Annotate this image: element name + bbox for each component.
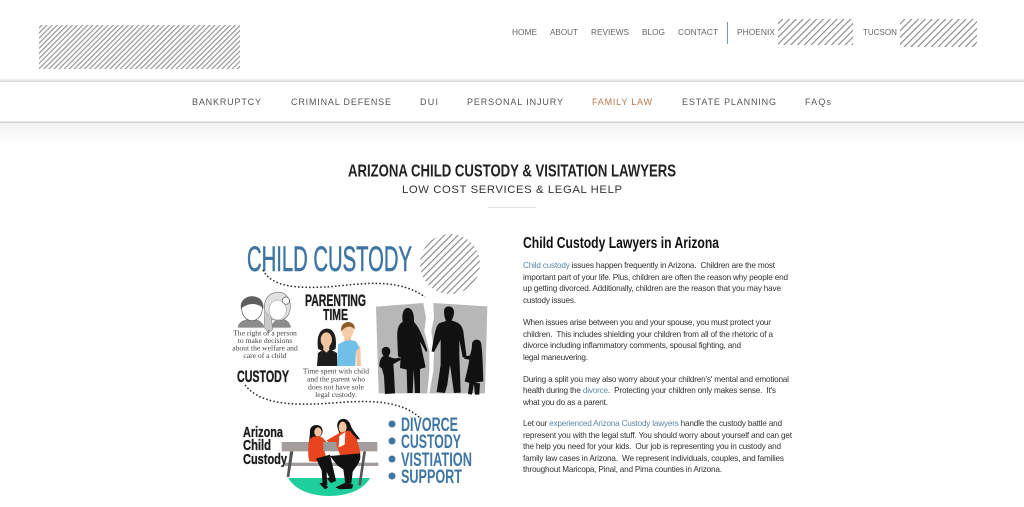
main navigation bar: BANKRUPTCY: [192, 97, 261, 107]
paragraph 3: [522, 375, 789, 407]
custody definition: [232, 328, 298, 360]
services list: SUPPORT: [401, 467, 462, 488]
torn family photo: [376, 303, 487, 395]
parenting time definition: does not have sole: [308, 382, 365, 392]
paragraph 2: [523, 318, 773, 362]
top navigation: REVIEWS: [591, 28, 630, 37]
arizona child custody label: Child: [243, 437, 271, 454]
main navigation bar: [0, 78, 1024, 144]
icon: boy and girl: [238, 292, 291, 333]
paragraph 1: custody issues.: [523, 296, 576, 305]
main navigation bar: ESTATE PLANNING: [682, 97, 776, 107]
paragraph 1: important part of your life. Plus, children are often the reason why people end: [523, 273, 788, 282]
infographic: child custody: [232, 234, 487, 496]
paragraph 2: legal maneuvering.: [523, 353, 588, 362]
services list: [388, 415, 472, 488]
top navigation: [512, 22, 728, 44]
main navigation bar: DUI: [420, 97, 438, 107]
main navigation bar: CRIMINAL DEFENSE: [291, 97, 391, 107]
custody definition: to make decisions: [238, 336, 292, 345]
phoenix phone: [737, 19, 853, 45]
paragraph 1: [523, 261, 788, 305]
custody definition: The right of a person: [233, 328, 297, 338]
custody definition: about the welfare and: [232, 344, 298, 352]
arizona child custody label: [243, 424, 287, 468]
tucson phone: [863, 19, 977, 47]
dotted path lower: [245, 385, 420, 418]
services list: DIVORCE: [401, 415, 458, 436]
paragraph 4: family law cases in Arizona. We represent individuals, couples, and families: [523, 454, 784, 463]
paragraph 2: When issues arise between you and your spouse, you must protect your: [523, 318, 771, 327]
parenting time label: TIME: [323, 307, 348, 324]
paragraph 3: what you do as a parent.: [522, 398, 608, 407]
arizona child custody label: Arizona: [243, 424, 283, 441]
parenting time definition: Time spent with child: [303, 366, 369, 376]
parenting time label: PARENTING: [305, 292, 366, 310]
paragraph 3: During a split you may also worry about your children's' mental and emotional: [523, 375, 789, 384]
custody definition: care of a child: [243, 351, 287, 360]
paragraph 2: children. This includes shielding your children from all of the rhetoric of a: [523, 330, 773, 339]
parenting time label: [305, 292, 366, 324]
subtitle: LOW COST SERVICES & LEGAL HELP: [402, 184, 622, 196]
paragraph 4: [523, 419, 793, 474]
paragraph 1: Child custody issues happen frequently in Arizona. Children are the most: [523, 261, 776, 270]
main navigation bar: PERSONAL INJURY: [467, 97, 563, 107]
top navigation: HOME: [512, 28, 538, 37]
icon: parents: [317, 322, 361, 366]
services list: CUSTODY: [401, 432, 461, 453]
paragraph 2: divorce including inflammatory comments, spousal fighting, and: [523, 341, 741, 350]
top navigation: ABOUT: [550, 28, 578, 37]
paragraph 4: the help you need for your kids. Our job is representing you in custody and: [523, 442, 781, 451]
silhouette: child left: [379, 347, 401, 394]
paragraph 1: up getting divorced. Additionally, children are the reason that you may have: [523, 284, 781, 293]
page title: ARIZONA CHILD CUSTODY & VISITATION LAWYERS: [348, 160, 676, 180]
logo placeholder: [39, 25, 240, 69]
main navigation bar: FAQs: [805, 97, 832, 107]
infographic title: CHILD CUSTODY: [247, 240, 412, 279]
mother: [337, 419, 360, 439]
top navigation: CONTACT: [678, 28, 718, 37]
paragraph 4: Let our experienced Arizona Custody lawyers handle the custody battle and: [523, 419, 782, 428]
services list: VISTIATION: [401, 450, 472, 471]
phoenix phone: PHOENIX: [737, 28, 776, 37]
paragraph 3: health during the divorce. Protecting your children only makes sense. It's: [523, 386, 776, 395]
hatched circle: [420, 234, 480, 294]
dotted path upper: [263, 270, 425, 297]
daughter: [309, 425, 323, 445]
top navigation: BLOG: [642, 28, 665, 37]
tucson phone: TUCSON: [863, 28, 897, 37]
main navigation bar: FAMILY LAW: [592, 97, 652, 107]
silhouette: father: [432, 306, 467, 393]
silhouette: mother: [397, 308, 427, 393]
paragraph 4: represent you with the legal stuff. You should worry about yourself and can get: [523, 431, 793, 440]
arizona child custody label: Custody: [243, 451, 287, 468]
parenting time definition: [303, 366, 369, 399]
parenting time definition: and the parent who: [307, 374, 365, 384]
custody label: CUSTODY: [237, 367, 289, 386]
silhouette: child right: [464, 340, 483, 395]
paragraph 4: throughout Maricopa, Pinal, and Pima counties in Arizona.: [523, 465, 722, 474]
parenting time definition: legal custody.: [315, 390, 357, 399]
article heading: Child Custody Lawyers in Arizona: [523, 235, 719, 252]
illustration: mother and daughter on bench: [282, 419, 378, 496]
